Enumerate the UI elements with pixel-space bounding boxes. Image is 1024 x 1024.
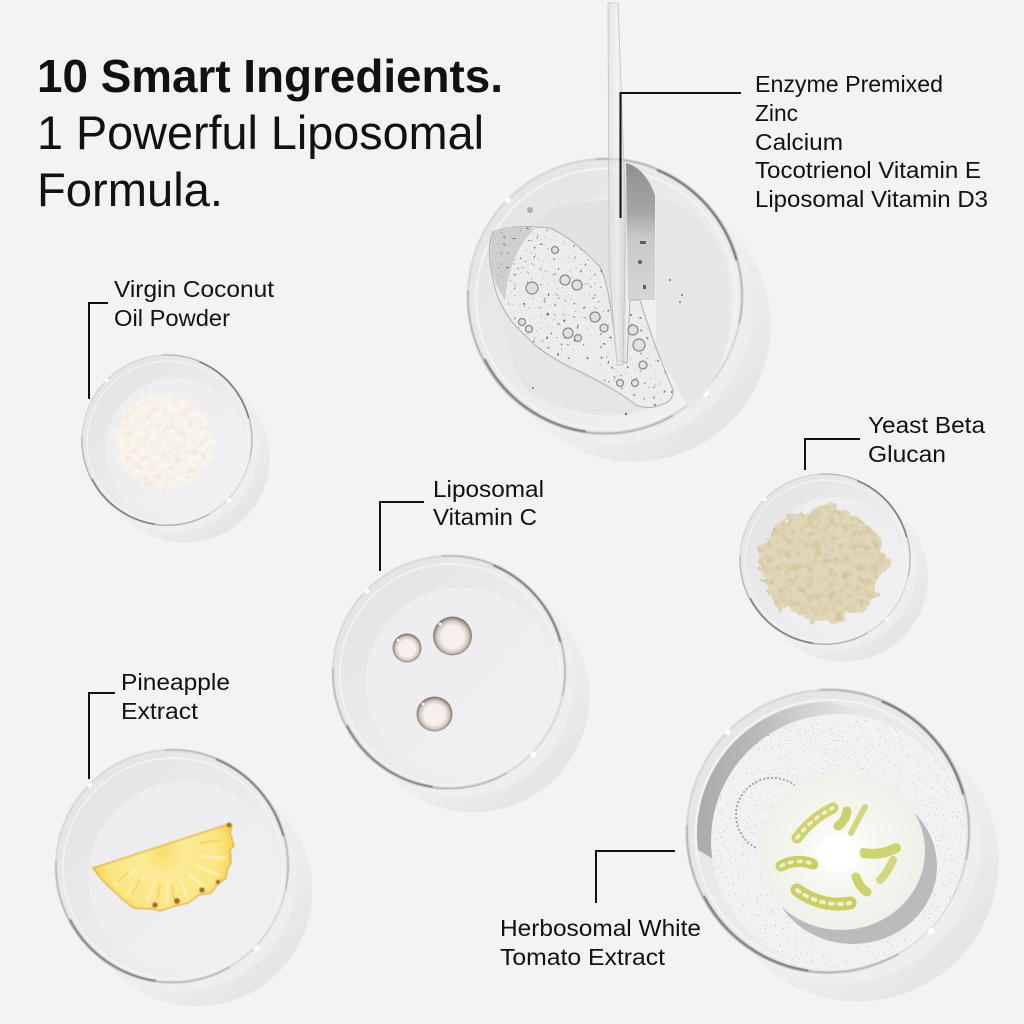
callout: yeast beta glucan: Glucan xyxy=(868,441,946,467)
panel: white tomato extract dish xyxy=(687,690,999,1002)
title: Formula. xyxy=(37,163,223,216)
dish floor right panel xyxy=(656,196,732,410)
callout: serum ingredients: Tocotrienol Vitamin E xyxy=(755,157,981,183)
panel: coconut oil powder dish xyxy=(82,355,270,543)
callout: virgin coconut oil powder: Oil Powder xyxy=(114,305,230,331)
callout: liposomal vitamin C: Liposomal xyxy=(433,476,544,502)
panel: pineapple extract dish xyxy=(56,750,312,1006)
speckled gel floor xyxy=(711,714,965,968)
ring mark xyxy=(736,778,810,852)
callout: serum ingredients: Zinc xyxy=(755,100,798,126)
callout: herbosomal white tomato extract: Tomato Extract xyxy=(500,944,665,970)
pineapple slice xyxy=(93,823,234,911)
callout: virgin coconut oil powder xyxy=(89,276,274,399)
dish floor left panel xyxy=(502,197,640,413)
callout: serum ingredients xyxy=(620,71,988,218)
callout: yeast beta glucan xyxy=(805,412,986,470)
band detail marks xyxy=(638,241,646,289)
callout: herbosomal white tomato extract: Herbosomal White xyxy=(500,915,701,941)
panel: liposomal vitamin C dish xyxy=(333,556,589,812)
callout: pineapple extract xyxy=(89,669,230,779)
title: 1 Powerful Liposomal xyxy=(37,106,484,159)
callout: serum ingredients: Liposomal Vitamin D3 xyxy=(755,186,988,212)
callout: liposomal vitamin C: Vitamin C xyxy=(433,504,537,530)
droplets on floor xyxy=(527,207,683,415)
drop 2 xyxy=(433,616,472,656)
tomato slice xyxy=(757,772,925,930)
panel: yeast beta glucan dish xyxy=(740,474,928,662)
light floor lower section xyxy=(502,300,660,415)
reflection band behind pipette xyxy=(626,163,655,300)
callout: pineapple extract: Pineapple xyxy=(121,669,230,695)
callout: yeast beta glucan: Yeast Beta xyxy=(868,412,986,438)
powder: yeast xyxy=(760,508,886,620)
callout: pineapple extract: Extract xyxy=(121,698,198,724)
callout: serum ingredients: Enzyme Premixed xyxy=(755,71,943,97)
title xyxy=(37,50,503,216)
gel blob xyxy=(484,224,676,410)
callout: serum ingredients: Calcium xyxy=(755,129,843,155)
pipette xyxy=(608,3,626,365)
callout: liposomal vitamin C xyxy=(380,476,544,571)
tomato shadow xyxy=(769,788,937,944)
powder: coconut xyxy=(116,395,214,489)
drop 1 xyxy=(392,634,422,662)
callout: herbosomal white tomato extract xyxy=(500,851,701,970)
panel: serum dish with pipette xyxy=(468,3,771,462)
callout: virgin coconut oil powder: Virgin Coconut xyxy=(114,276,274,302)
bubbles xyxy=(518,246,647,386)
drop 3 xyxy=(416,696,452,732)
gray band in dish xyxy=(697,702,858,860)
title: 10 Smart Ingredients. xyxy=(37,50,503,102)
